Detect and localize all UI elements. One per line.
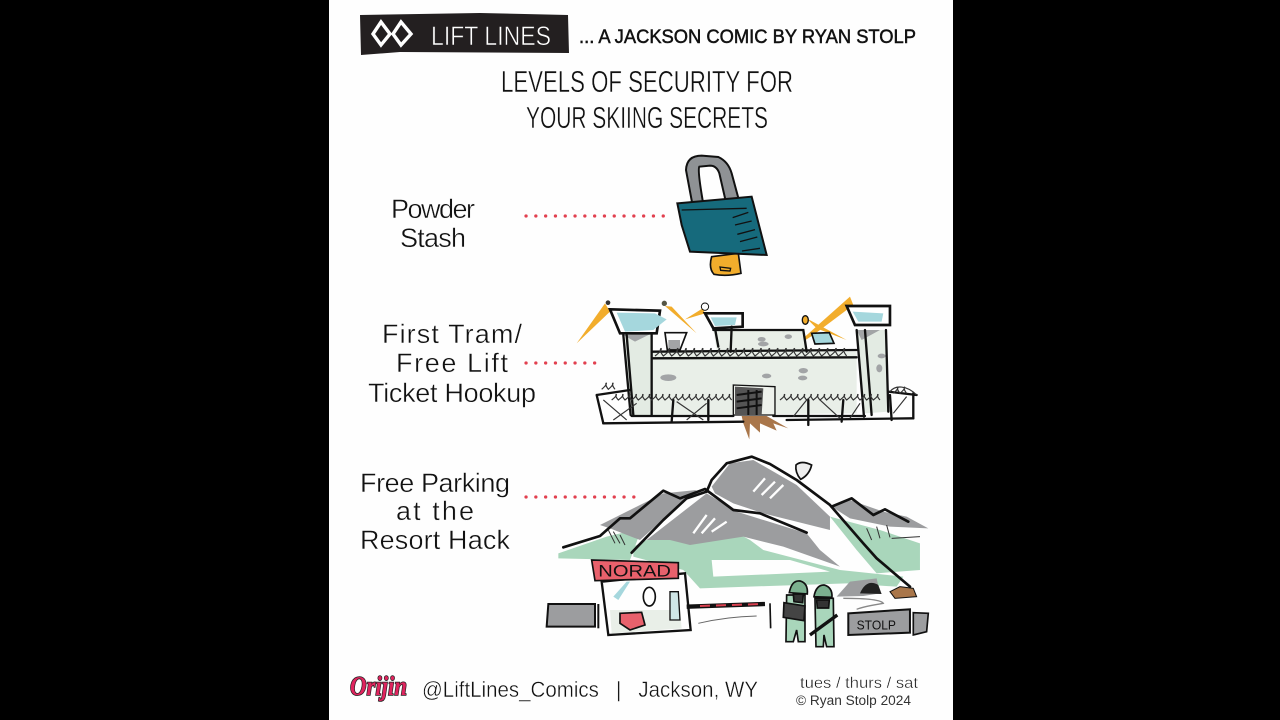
ink lines: [597, 327, 917, 425]
label: first tram: First Tram/: [382, 319, 522, 349]
schedule: tues / thurs / sat: [800, 675, 919, 692]
comic byline: ... A JACKSON COMIC BY RYAN STOLP: [579, 27, 916, 48]
left barrier: [547, 604, 598, 628]
title: YOUR SKIING SECRETS: [526, 100, 768, 135]
copyright: © Ryan Stolp 2024: [796, 693, 911, 708]
grey rock: [600, 460, 928, 597]
lights: [606, 300, 610, 305]
gate: [733, 385, 775, 415]
windows: [610, 309, 660, 333]
label: free parking: Free Parking: [360, 468, 510, 498]
illustration: fortress: [577, 297, 917, 439]
icon: padlock: [677, 156, 767, 275]
walls: [652, 330, 857, 415]
guards: [770, 581, 837, 647]
title: [501, 64, 793, 135]
radar dish: [796, 462, 812, 479]
dotted connector: free parking: [526, 495, 637, 499]
mountain outlines: [563, 457, 910, 587]
label: first tram: [368, 319, 536, 408]
label: free parking: Resort Hack: [360, 525, 510, 555]
footer handle: @LiftLines_Comics | Jackson, WY: [422, 677, 758, 702]
booth: [602, 573, 691, 635]
label: free parking: [360, 468, 510, 555]
green slopes: [558, 513, 920, 588]
title: LEVELS OF SECURITY FOR: [501, 64, 793, 99]
dotted connector: first tram: [526, 361, 603, 365]
label: free parking: at the: [396, 496, 474, 526]
panel: comic page: [329, 0, 953, 720]
header banner: [360, 13, 569, 55]
road: [843, 598, 883, 609]
header banner: LIFT LINES: [431, 21, 551, 51]
tunnel: [860, 583, 882, 594]
searchlights: [577, 297, 853, 350]
razor wire: [602, 348, 917, 420]
dotted connector: powder stash: [526, 214, 672, 218]
car: [890, 587, 917, 598]
label: powder stash: Powder: [391, 194, 475, 224]
label: first tram: Free Lift: [396, 348, 508, 378]
label: powder stash: Stash: [400, 223, 466, 253]
NORAD sign: [592, 560, 678, 581]
boom gate: [687, 604, 765, 607]
illustration: NORAD mountain: NORAD: [598, 562, 671, 581]
illustration: NORAD mountain: STOLP: [857, 617, 896, 632]
label: powder stash: [391, 194, 475, 253]
logo: Orijin: Orijin: [350, 671, 407, 701]
illustration: NORAD mountain: [547, 457, 928, 647]
label: first tram: Ticket Hookup: [368, 378, 536, 408]
stolp barrier: [848, 609, 910, 635]
